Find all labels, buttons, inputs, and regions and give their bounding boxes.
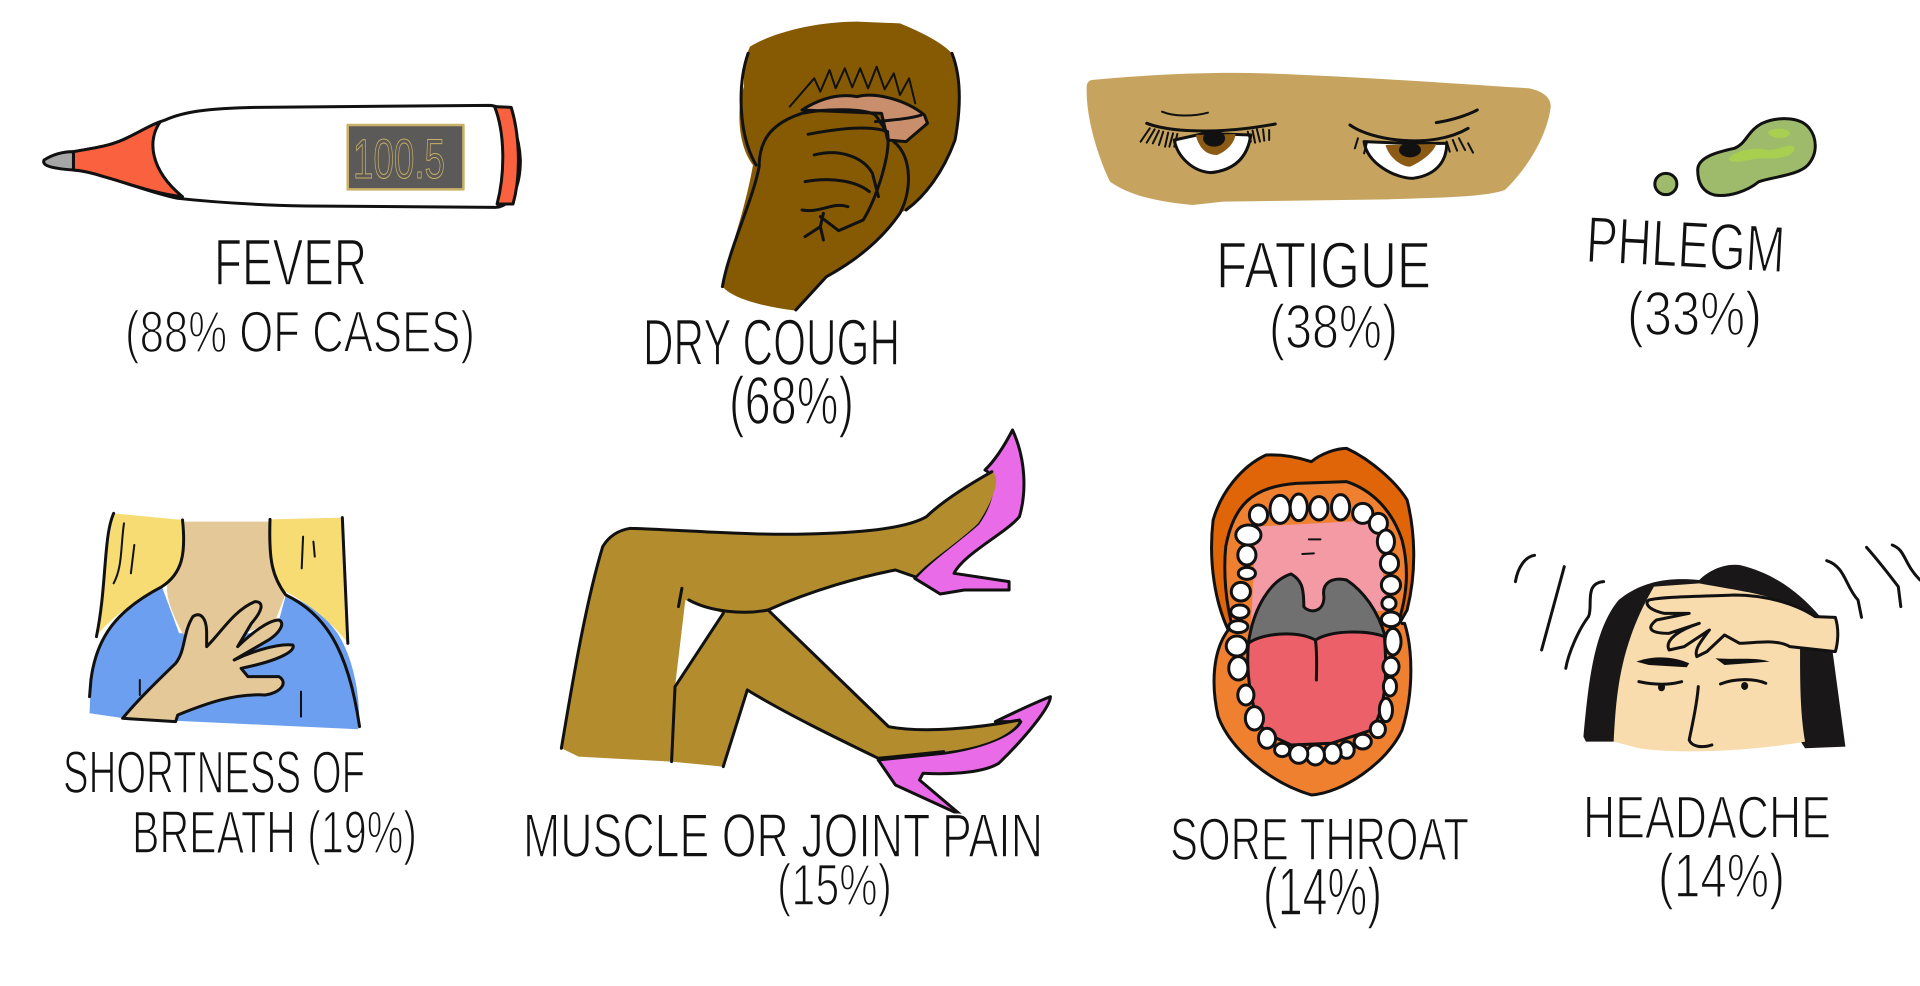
label: fever: FEVER [214,225,367,299]
icon: thermometer [44,105,520,207]
label: headache: HEADACHE [1583,784,1831,851]
label: phlegm: PHLEGM [1584,202,1787,286]
icon: phlegm blob [1655,119,1815,196]
icon: tired eyes [1087,73,1551,205]
thermometer display reading: 100.5 [353,127,445,190]
label: fatigue: FATIGUE [1216,228,1431,302]
label: fatigue percentage: (38%) [1269,293,1398,362]
pain motion lines [1515,545,1920,668]
label: breath percentage: BREATH (19%) [132,799,417,866]
panel: sore throat [1170,448,1469,930]
icon: head with hand on forehead [1515,545,1920,751]
panel: headache [1515,545,1920,911]
icon: hand on chest [90,513,360,729]
panel: fever [44,105,520,365]
label: sore throat percentage: (14%) [1263,854,1382,930]
panel: phlegm [1584,119,1815,349]
label: headache percentage: (14%) [1658,842,1785,911]
teeth [1226,494,1401,765]
panel: shortness of breath [63,513,417,866]
panel: dry cough [643,22,959,439]
label: phlegm percentage: (33%) [1627,280,1762,349]
icon: legs in heels [561,430,1050,815]
label: sore throat: SORE THROAT [1170,806,1469,873]
icon: open mouth [1212,448,1414,795]
label: muscle or joint pain percentage: (15%) [777,853,892,918]
panel: fatigue [1087,73,1551,362]
label: dry cough: DRY COUGH [643,305,900,379]
label: shortness of: SHORTNESS OF [63,739,365,806]
icon: fist over mouth [722,22,959,311]
label: muscle or joint pain: MUSCLE OR JOINT PAIN [523,802,1043,871]
label: dry cough percentage: (68%) [729,363,854,439]
panel: muscle or joint pain [523,430,1050,918]
label: fever percentage: (88% OF CASES) [125,300,475,365]
